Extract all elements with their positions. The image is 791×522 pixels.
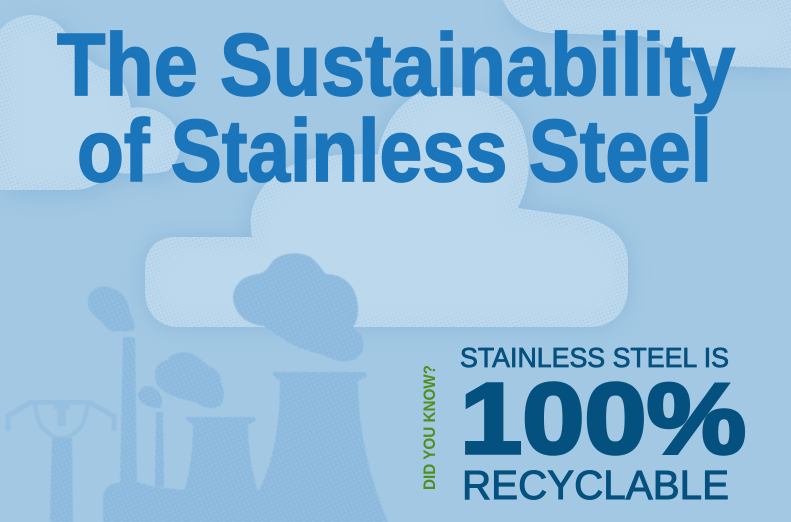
title line 1: The Sustainability xyxy=(57,15,735,114)
icon: large cooling tower xyxy=(250,372,388,522)
icon: chimney smoke puff xyxy=(88,287,135,331)
icon: short chimney xyxy=(155,412,164,487)
text: stainless steel is: STAINLESS STEEL IS xyxy=(460,342,729,373)
label: did you know: DID YOU KNOW? xyxy=(420,365,439,490)
icon: pylon head xyxy=(8,402,114,438)
icon: medium smoke cloud xyxy=(155,352,224,408)
cloud: centre xyxy=(145,87,628,327)
icon: small smoke puff xyxy=(138,386,162,408)
illustration: power plant silhouette xyxy=(50,253,388,522)
callout: did you know xyxy=(420,342,746,508)
icon: large smoke cloud xyxy=(233,253,364,361)
icon: tall chimney xyxy=(120,337,137,484)
stat: 100%: 100% xyxy=(460,363,746,475)
title line 2: of Stainless Steel xyxy=(77,101,712,200)
text: recyclable: RECYCLABLE xyxy=(462,462,729,508)
title xyxy=(57,15,735,200)
cloud: left xyxy=(0,15,186,196)
icon: pylon mast xyxy=(50,438,73,522)
cloud: top right xyxy=(503,0,791,74)
icon: small cooling tower xyxy=(184,417,258,492)
icon: factory base xyxy=(103,482,262,522)
